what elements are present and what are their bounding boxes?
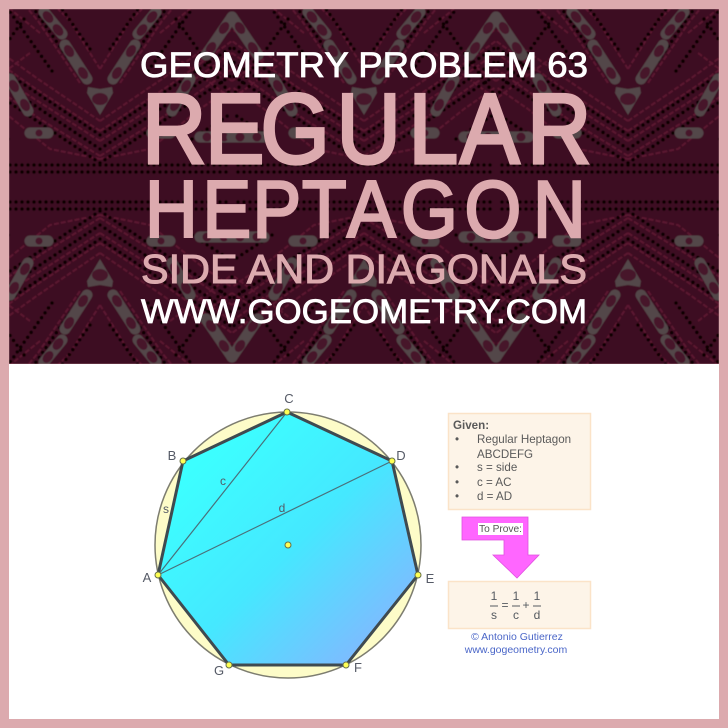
formula box: c: [513, 608, 519, 622]
given box: Regular Heptagon: [477, 433, 571, 446]
arrow: to prove: To Prove:: [479, 524, 522, 535]
formula box: +: [522, 598, 530, 612]
title: website: WWW.GOGEOMETRY.COM: [141, 293, 587, 331]
given box: s = side: [477, 461, 517, 474]
title: geometry problem 63: GEOMETRY PROBLEM 63: [140, 46, 588, 85]
point and segment labels: B: [168, 448, 176, 463]
point and segment labels: s: [163, 502, 169, 516]
regular heptagon: [158, 412, 418, 665]
point and segment labels: G: [214, 663, 224, 678]
title: regular: REGULAR: [142, 74, 591, 184]
title: heptagon: HEPTAGON: [145, 164, 586, 255]
given box: •: [455, 490, 459, 503]
point and segment labels: F: [354, 660, 362, 675]
credits: www.gogeometry.com: [464, 644, 568, 656]
formula box: 1: [491, 589, 498, 603]
given box: •: [455, 461, 459, 474]
arrow: to prove: [462, 517, 539, 578]
diagonals c and d: [158, 412, 392, 575]
formula box: =: [501, 598, 509, 612]
given box: ABCDEFG: [477, 448, 533, 461]
given box: •: [455, 476, 459, 489]
point and segment labels: A: [143, 570, 152, 585]
point and segment labels: D: [396, 448, 406, 463]
circumscribed circle: [155, 412, 421, 678]
point and segment labels: c: [220, 474, 226, 488]
point and segment labels: E: [426, 571, 435, 586]
white lower panel: [9, 364, 719, 719]
given box: d = AD: [477, 490, 512, 503]
formula box: [448, 582, 590, 628]
given box: [448, 414, 590, 510]
vertex points: [155, 409, 421, 668]
given box: •: [455, 433, 459, 446]
point and segment labels: C: [284, 391, 294, 406]
formula box: d: [534, 608, 540, 622]
header titles: [140, 46, 591, 331]
title: side and diagonals: SIDE AND DIAGONALS: [141, 246, 587, 292]
point and segment labels: d: [279, 501, 285, 515]
geometry diagram: [143, 391, 435, 678]
patterned header panel: [9, 9, 719, 364]
given box: Given:: [453, 419, 489, 432]
formula box: 1: [513, 589, 520, 603]
point and segment labels: [143, 391, 435, 678]
formula box: 1: [534, 589, 541, 603]
formula box: s: [491, 608, 497, 622]
credits: [464, 631, 568, 656]
credits: © Antonio Gutierrez: [471, 631, 563, 643]
given box: c = AC: [477, 476, 511, 489]
